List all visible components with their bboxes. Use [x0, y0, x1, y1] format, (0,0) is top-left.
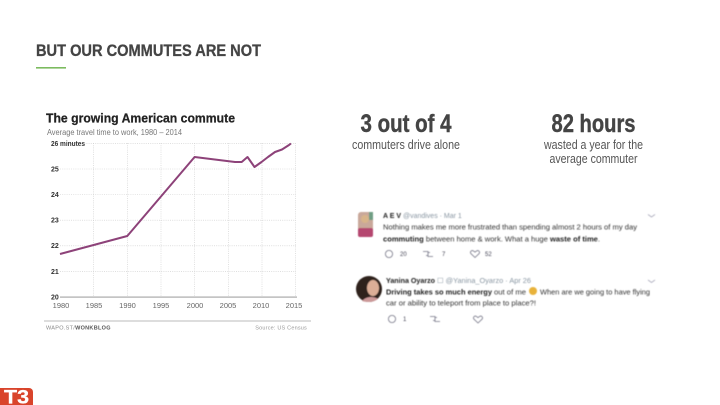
x axis labels: 1980	[53, 301, 69, 310]
tweet 1 actions	[385, 250, 480, 258]
chart credit: WAPO.ST/WONKBLOG	[46, 326, 111, 332]
T3 logo	[0, 388, 33, 405]
stat: 82 hours	[543, 110, 643, 166]
y axis labels: 21	[51, 269, 59, 276]
tweet 2: ☐ @Yanina_Oyarzo · Apr 26	[437, 277, 531, 285]
chart: growing American commute	[44, 110, 311, 332]
tweet 2: Yanina Oyarzo	[386, 278, 435, 285]
y axis labels: 25	[51, 166, 59, 174]
tweet 2: car or ability to teleport from place to place?!	[386, 298, 536, 308]
avatar 1	[358, 212, 373, 237]
tweet 1: commuting between home & work. What a huge waste of time.	[383, 234, 600, 244]
tweet 1: 20	[400, 252, 407, 258]
tweet 2: When are we going to have flying	[540, 288, 650, 296]
chevron	[648, 280, 655, 282]
tweet 1: Nothing makes me more frustrated than spending almost 2 hours of my day	[383, 222, 637, 232]
y axis labels: 23	[51, 218, 59, 224]
tweet 2: out of me	[494, 288, 526, 296]
grid lines	[60, 143, 296, 297]
x axis labels	[53, 301, 302, 310]
tweet 1: A E V @vandives · Mar 1	[383, 213, 462, 220]
tweet 2 actions	[388, 315, 483, 323]
avatar 2	[356, 276, 382, 302]
x axis labels: 2015	[286, 301, 302, 310]
stat: 82 hours: wasted a year for the	[543, 138, 643, 152]
stat: 3 out of 4	[352, 110, 460, 152]
chart footer rule	[44, 320, 311, 322]
x axis line	[60, 296, 297, 298]
y axis labels: 20	[51, 294, 59, 302]
tweet 1: 52	[485, 252, 492, 258]
x axis labels: 2005	[220, 301, 236, 310]
emoji	[529, 287, 537, 295]
stat: 82 hours: average commuter	[550, 152, 638, 166]
title: BUT OUR COMMUTES ARE NOT	[36, 41, 262, 60]
tweet 2: Driving takes so much energy	[386, 288, 493, 296]
tweet 2	[356, 276, 655, 323]
tweet 2: 1	[403, 317, 407, 323]
x axis labels: 2000	[187, 301, 203, 310]
title accent rule	[36, 67, 66, 69]
chart source: Source: US Census	[255, 326, 307, 332]
y axis labels: 26 minutes	[51, 141, 85, 148]
x axis labels: 1990	[119, 301, 136, 310]
stat: 3 out of 4: 3 out of 4	[360, 110, 452, 138]
stat: 82 hours: 82 hours	[552, 110, 636, 138]
y axis labels: 22	[51, 243, 59, 250]
chevron	[648, 214, 655, 217]
tweet 1	[358, 212, 655, 258]
chart subtitle: Average travel time to work, 1980 – 2014	[47, 128, 183, 137]
chart title: The growing American commute	[46, 110, 235, 126]
y axis labels: 24	[51, 192, 59, 199]
tweet 1: 7	[442, 252, 446, 258]
x axis labels: 1995	[153, 301, 169, 310]
stat: 3 out of 4: commuters drive alone	[352, 138, 460, 152]
x axis labels: 1985	[86, 301, 102, 310]
x axis labels: 2010	[253, 301, 269, 310]
y axis labels	[51, 141, 85, 302]
data line	[60, 144, 291, 254]
